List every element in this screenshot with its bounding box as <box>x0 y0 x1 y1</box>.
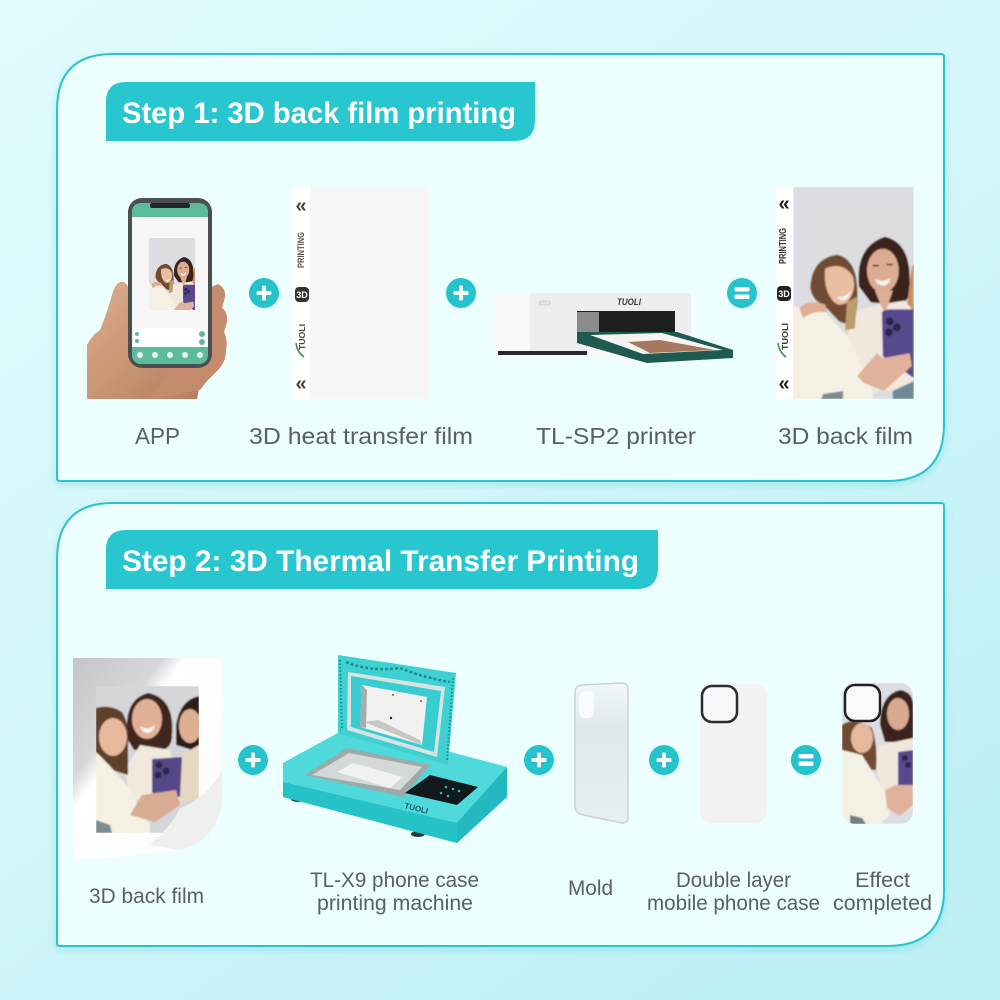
icon: 3D heat transfer film sheet: « <box>295 373 307 395</box>
panel: step 2 <box>57 503 944 946</box>
icon: 3D heat transfer film sheet: PRINTING <box>296 232 306 268</box>
icon: clear mold case <box>575 683 628 823</box>
icon: 3D heat transfer film sheet <box>293 187 430 399</box>
label: 3D back film: 3D back film <box>89 885 204 908</box>
icon: completed printed phone case <box>842 683 913 824</box>
panel 2 frame <box>57 503 944 946</box>
label: 3D back film: 3D back film <box>778 423 913 449</box>
heading: step 1 <box>106 82 535 141</box>
icon: hand holding phone with app <box>87 198 227 399</box>
label: Double layer mobile phone case: mobile phone case <box>647 892 820 915</box>
heading: step 1: Step 1: 3D back film printing <box>122 97 516 130</box>
icon: printed 3D back film: « <box>778 193 790 215</box>
icon: TL-SP2 printer <box>493 293 733 363</box>
icon: printed 3D back film: 3D <box>778 289 790 299</box>
label: Double layer mobile phone case <box>647 869 820 915</box>
icon: 3D heat transfer film sheet: 3D <box>296 290 308 300</box>
label: Double layer mobile phone case: Double layer <box>676 869 791 892</box>
label: Effect completed: Effect <box>855 869 910 892</box>
icon: printed 3D back film <box>776 187 914 399</box>
icon: printed 3D back film: « <box>778 373 790 395</box>
icon: equals 1 <box>727 278 757 308</box>
panel: step 1 <box>57 54 944 481</box>
icon: printed 3D back film: TUOLI <box>781 323 790 350</box>
label: TL-X9 phone case printing machine <box>310 869 479 915</box>
icon: plus 3 <box>238 745 268 775</box>
icon: plus 5 <box>649 745 679 775</box>
label: Effect completed <box>833 869 932 915</box>
label: APP: APP <box>135 423 180 449</box>
label: TL-X9 phone case printing machine: printing machine <box>317 892 473 915</box>
app photo preview <box>149 238 195 310</box>
icon: TL-X9 phone case printing machine <box>283 655 507 843</box>
icon: plus 4 <box>524 745 554 775</box>
icon: printed 3D back film: PRINTING <box>778 228 789 264</box>
label: Mold: Mold <box>568 877 613 900</box>
icon: TL-SP2 printer: TUOLI <box>617 297 641 307</box>
icon: 3D back film sheet with peeling corner <box>73 658 222 859</box>
icon: double layer phone case <box>700 684 767 823</box>
label: TL-X9 phone case printing machine: TL-X9 phone case <box>310 869 479 892</box>
icon: TL-X9 phone case printing machine: TUOLI <box>404 801 429 816</box>
icon: equals 2 <box>791 745 821 775</box>
heading: step 2 <box>106 530 658 589</box>
icon: plus 2 <box>446 278 476 308</box>
heading: step 2: Step 2: 3D Thermal Transfer Printing <box>122 545 639 578</box>
icon: 3D heat transfer film sheet: « <box>295 195 307 217</box>
icon: 3D heat transfer film sheet: TUOLI <box>298 324 307 350</box>
label: TL-SP2 printer: TL-SP2 printer <box>536 423 696 449</box>
panel 1 frame <box>57 54 944 481</box>
label: Effect completed: completed <box>833 892 932 915</box>
label: 3D heat transfer film: 3D heat transfer film <box>249 423 473 449</box>
icon: plus 1 <box>249 278 279 308</box>
